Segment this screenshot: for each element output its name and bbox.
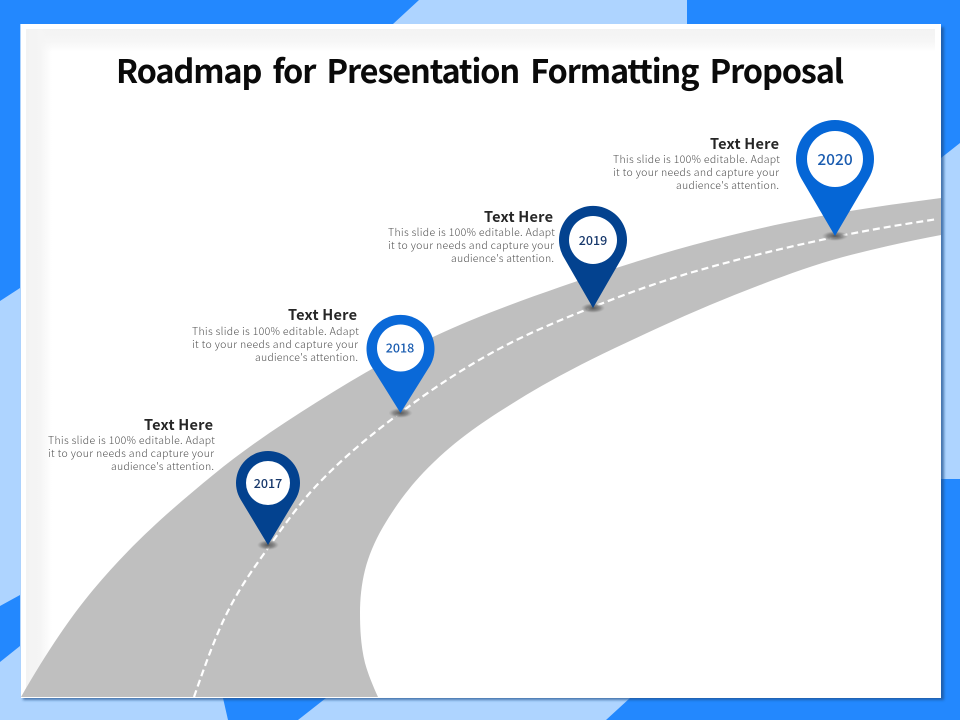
text block: 2019: This slide is 100% editable. Adapt <box>388 225 555 240</box>
shape: right lower blue band <box>606 479 960 720</box>
text block: 2017 <box>48 414 215 474</box>
title: Roadmap for Presentation Formatting Proposal <box>116 46 844 93</box>
text block: 2020: audience's attention. <box>676 178 779 193</box>
text block: 2017: Text Here <box>144 414 213 435</box>
text block: 2019: it to your needs and capture your <box>388 238 554 253</box>
text block: 2018: This slide is 100% editable. Adapt <box>192 324 359 339</box>
text block: 2020: This slide is 100% editable. Adapt <box>613 152 780 167</box>
pin: 2018 <box>366 315 434 418</box>
shape: top-right blue band <box>687 0 960 158</box>
pin: 2017: 2017 <box>254 473 282 492</box>
pin: 2020: 2020 <box>817 148 853 170</box>
shape: bottom blue band <box>223 698 326 720</box>
text block: 2018 <box>192 304 359 365</box>
panel inner shading: top <box>26 29 935 52</box>
shape: top-left blue band <box>0 0 419 301</box>
road centre dashed line <box>194 219 938 697</box>
text block: 2020: Text Here <box>710 133 779 154</box>
shape: left blue patch <box>0 595 20 662</box>
text block: 2019: Text Here <box>484 206 553 227</box>
text block: 2018: audience's attention. <box>255 350 358 365</box>
text block: 2019 <box>388 206 555 266</box>
text block: 2020 <box>613 133 780 193</box>
text block: 2017: This slide is 100% editable. Adapt <box>48 433 215 448</box>
pin: 2020 <box>796 120 874 241</box>
text block: 2020: it to your needs and capture your <box>613 165 779 180</box>
pin: 2017 <box>236 451 300 550</box>
text block: 2017: it to your needs and capture your <box>48 446 214 461</box>
pin: 2019 <box>559 206 627 313</box>
panel inner shading: left <box>26 29 52 697</box>
pin: 2018: 2018 <box>386 338 414 356</box>
road <box>21 198 941 697</box>
text block: 2017: audience's attention. <box>111 459 214 474</box>
text block: 2019: audience's attention. <box>451 251 554 266</box>
text block: 2018: Text Here <box>288 304 357 325</box>
text block: 2018: it to your needs and capture your <box>192 337 358 352</box>
pin: 2019: 2019 <box>579 230 607 249</box>
